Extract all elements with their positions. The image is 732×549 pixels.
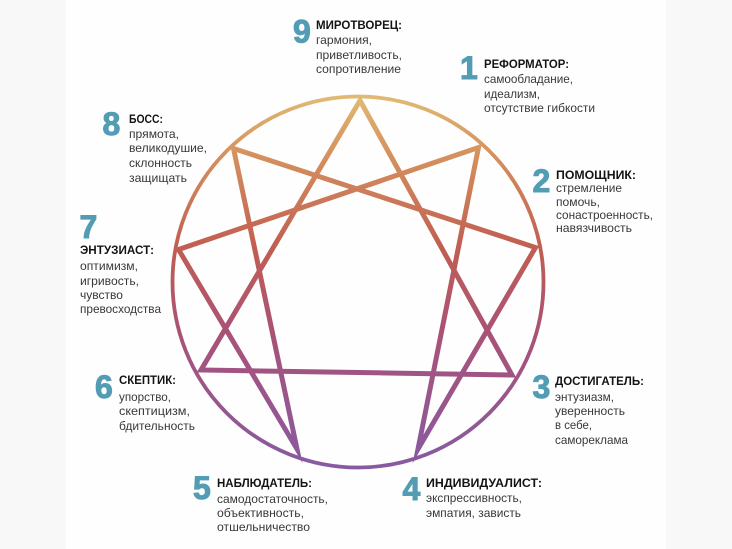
type 6: skeptic: СКЕПТИК:	[119, 373, 176, 387]
type 8: boss: склонность	[129, 156, 192, 170]
enneagram diagram	[172, 96, 544, 468]
type 5: observer: НАБЛЮДАТЕЛЬ:	[217, 476, 312, 490]
type 6: skeptic: бдительность	[119, 419, 195, 433]
type 8: boss: прямота,	[129, 127, 179, 141]
type 2: helper: стремление	[556, 181, 622, 195]
type 3: achiever: самореклама	[555, 433, 628, 447]
type 1: reformer: 1	[460, 50, 478, 86]
type 2: helper: помочь,	[556, 195, 600, 209]
type 7: enthusiast: превосходства	[80, 302, 161, 316]
type 1: reformer: идеализм,	[484, 87, 540, 101]
type 6: skeptic: упорство,	[119, 390, 171, 404]
type 4: individualist: ИНДИВИДУАЛИСТ:	[426, 476, 542, 490]
type 7: enthusiast: ЭНТУЗИАСТ:	[80, 243, 154, 257]
type 3: achiever: ДОСТИГАТЕЛЬ:	[555, 374, 644, 388]
type 7: enthusiast	[80, 209, 161, 316]
type 4: individualist: 4	[402, 471, 420, 507]
type 2: helper	[532, 163, 653, 235]
type 2: helper: сонастроенность,	[556, 208, 653, 222]
type 8: boss	[102, 106, 207, 185]
type 8: boss: защищать	[129, 171, 187, 185]
hexad 1-4-2-8-5-7	[178, 148, 536, 449]
type 1: reformer: РЕФОРМАТОР:	[484, 57, 569, 71]
type 5: observer: 5	[193, 470, 211, 506]
type 9: peacemaker: 9	[293, 14, 311, 50]
type 9: peacemaker: МИРОТВОРЕЦ:	[316, 18, 402, 32]
type 4: individualist: экспрессивность,	[426, 491, 522, 505]
type 4: individualist	[402, 471, 542, 520]
type 1: reformer	[460, 50, 595, 115]
type 4: individualist: эмпатия, зависть	[426, 506, 521, 520]
triangle 9-3-6	[201, 100, 512, 375]
type 5: observer: отшельничество	[217, 520, 310, 534]
type 6: skeptic: скептицизм,	[119, 404, 190, 418]
type 7: enthusiast: игривость,	[80, 274, 139, 288]
type 3: achiever: уверенность	[555, 404, 625, 418]
type 1: reformer: отсутствие гибкости	[484, 101, 595, 115]
type 7: enthusiast: чувство	[80, 288, 123, 302]
type 3: achiever: в себе,	[555, 418, 592, 432]
type 7: enthusiast: оптимизм,	[80, 259, 138, 273]
type 3: achiever: энтузиазм,	[555, 390, 614, 404]
type 7: enthusiast: 7	[80, 209, 97, 245]
type 2: helper: 2	[532, 163, 550, 199]
type 5: observer: самодостаточность,	[217, 492, 328, 506]
type 5: observer: объективность,	[217, 506, 304, 520]
type 2: helper: ПОМОЩНИК:	[556, 168, 636, 182]
type 6: skeptic: 6	[95, 369, 113, 405]
type 8: boss: 8	[102, 106, 120, 142]
outer circle	[172, 96, 544, 468]
type 1: reformer: самообладание,	[484, 72, 573, 86]
type 9: peacemaker: сопротивление	[316, 62, 401, 76]
type 6: skeptic	[95, 369, 195, 433]
type 9: peacemaker: гармония,	[316, 33, 372, 47]
type 8: boss: великодушие,	[129, 141, 207, 155]
type 3: achiever	[532, 369, 644, 447]
type 2: helper: навязчивость	[556, 221, 632, 235]
type 9: peacemaker: приветливость,	[316, 48, 402, 62]
type 9: peacemaker	[293, 14, 402, 76]
type 5: observer	[193, 470, 328, 534]
type 8: boss: БОСС:	[129, 112, 163, 126]
type 3: achiever: 3	[532, 369, 550, 405]
